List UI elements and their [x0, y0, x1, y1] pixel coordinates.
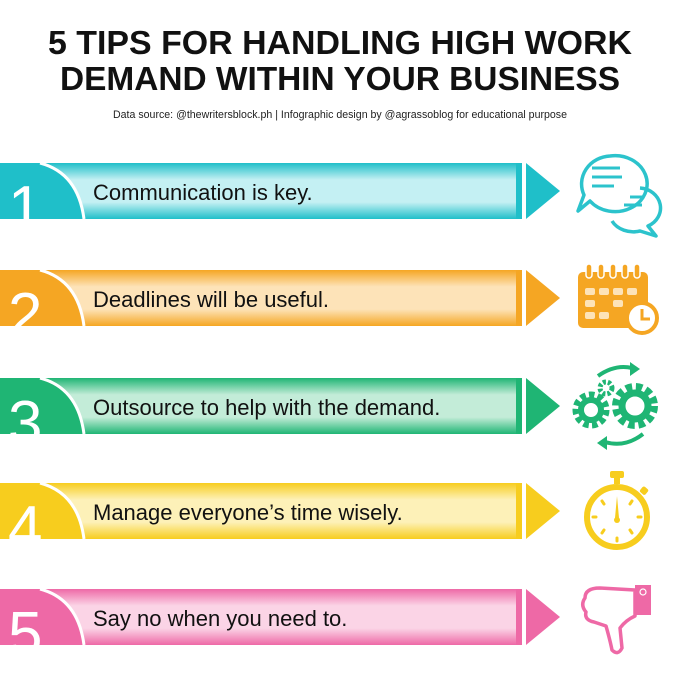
title: 5 TIPS FOR HANDLING HIGH WORK: [48, 24, 632, 61]
title: DEMAND WITHIN YOUR BUSINESS: [60, 60, 620, 97]
row 3: [0, 378, 560, 458]
icon: speech bubbles: [578, 156, 661, 236]
subtitle: Data source: @thewritersblock.ph | Infographic design by @agrassoblog for educational purpose: [113, 109, 567, 121]
icon: gears: [577, 362, 653, 450]
row 5: Say no when you need to.: [93, 606, 347, 631]
row 5: [0, 589, 560, 669]
icon: calendar: [578, 264, 657, 333]
row 4: [0, 483, 560, 563]
row 2: [0, 270, 560, 350]
row 1: Communication is key.: [93, 180, 313, 205]
row 4: 4: [8, 494, 42, 563]
row 5: 5: [8, 600, 42, 669]
icon: thumbs down: [583, 585, 651, 653]
title: [48, 24, 632, 97]
icon: stopwatch: [587, 471, 649, 547]
row 4: Manage everyone’s time wisely.: [93, 500, 403, 525]
row 2: 2: [8, 281, 42, 350]
row 2: Deadlines will be useful.: [93, 287, 329, 312]
row 1: 1: [8, 174, 42, 243]
row 1: [0, 163, 560, 243]
row 3: Outsource to help with the demand.: [93, 395, 440, 420]
row 3: 3: [8, 389, 42, 458]
